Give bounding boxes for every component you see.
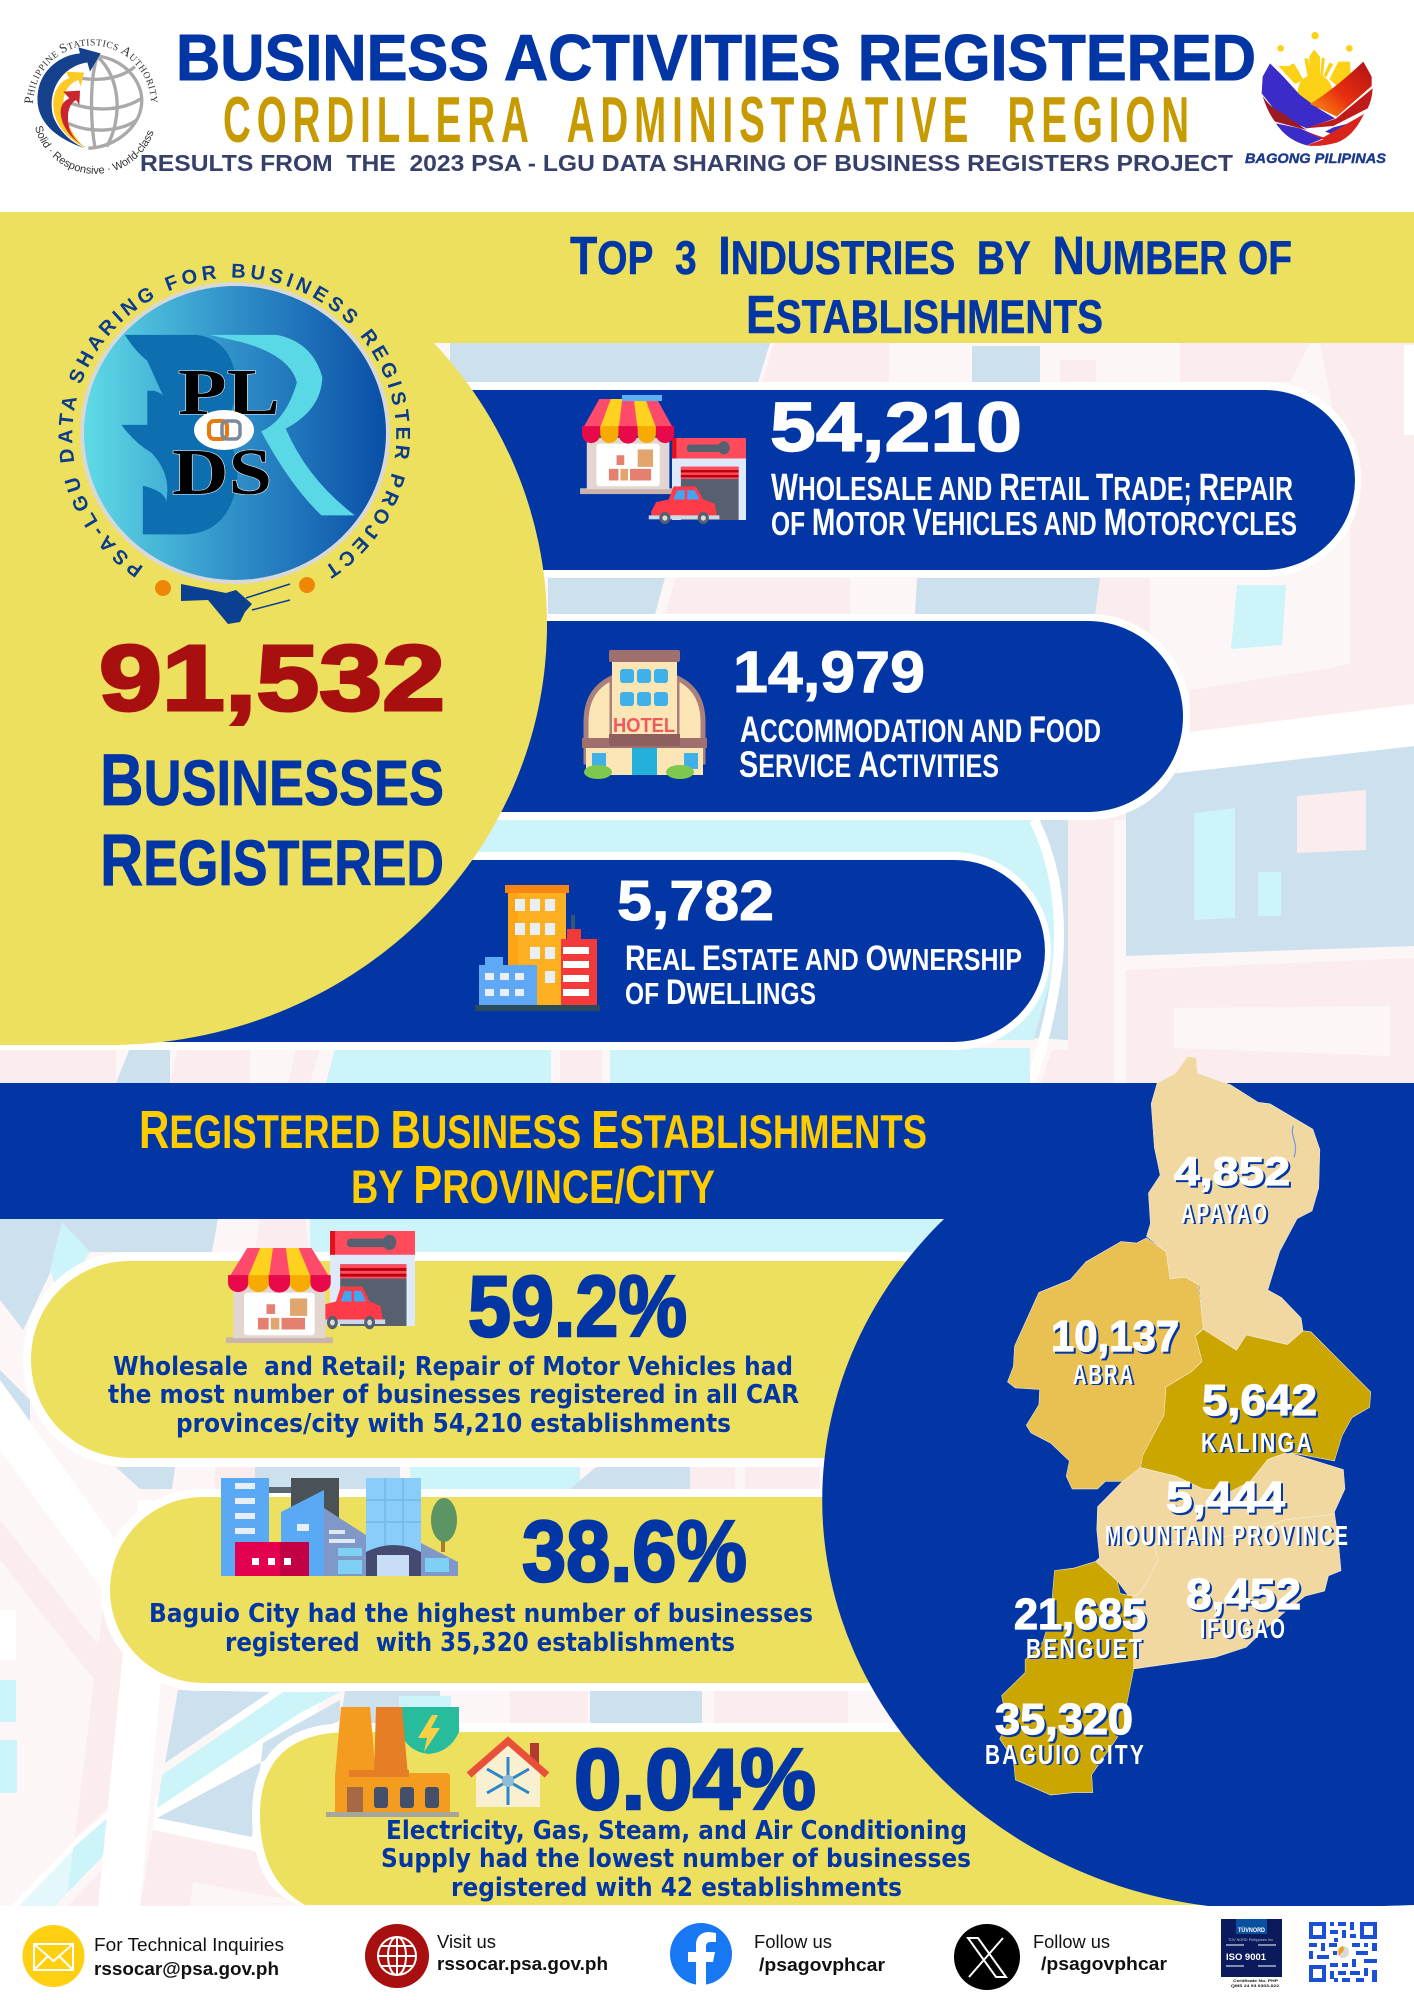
label: accommodation and food service: ACCOMMODATION AND FOOD [740, 709, 1101, 750]
label: businesses registered: REGISTERED [100, 818, 444, 901]
value: 54,210: 54,210 [770, 388, 1022, 466]
text: electricity note: registered with 42 establishments [451, 1873, 902, 1903]
logo disc [80, 282, 390, 584]
icon: hotel [582, 650, 707, 779]
value: Ifugao: IFUGAO [1200, 1613, 1287, 1644]
value: Ifugao [1186, 1570, 1301, 1644]
icon: globe [365, 1924, 429, 1988]
footer: email contact [22, 1925, 284, 1987]
pill: wholesale and retail [0, 382, 1361, 577]
logo letters [172, 356, 280, 509]
map shapes [1000, 1056, 1371, 1795]
icon: city buildings [475, 885, 600, 1011]
footer: X [954, 1924, 1167, 1990]
footer: QR code [1309, 1922, 1377, 1982]
heading: top 3 industries [570, 226, 1292, 345]
label: real estate and ownership: OF DWELLINGS [625, 972, 816, 1012]
value: Abra [1051, 1312, 1179, 1390]
icon: X [954, 1924, 1020, 1990]
value: Ifugao: 8,452 [1186, 1570, 1301, 1619]
panel: top 3 industries pills [0, 382, 1361, 1050]
header: PSA logo [24, 39, 158, 174]
icon: Facebook [670, 1923, 732, 1985]
footer: ISO 9001 badge: TÜVNORD [1238, 1927, 1266, 1934]
value: Baguio City: BAGUIO CITY [985, 1739, 1146, 1770]
label: businesses registered [100, 738, 444, 901]
value: Benguet: 21,685 [1014, 1590, 1146, 1639]
value: Mountain Province [1105, 1473, 1350, 1551]
label: accommodation and food service: SERVICE ACTIVITIES [739, 744, 999, 785]
callout: electricity 0.04% [326, 1700, 971, 1903]
heading: registered business establishments [139, 1100, 927, 1215]
river: Apayao [1292, 1126, 1296, 1157]
value: Benguet: BENGUET [1026, 1633, 1144, 1664]
text: wholesale note: the most number of businesses registered in all CAR [108, 1380, 799, 1410]
total: 91,532: 91,532 [99, 626, 445, 730]
icon: hotel: HOTEL [613, 715, 675, 737]
header: PSA logo: Solid · Responsive · World-class [36, 126, 154, 174]
footer: website: Visit us [437, 1932, 496, 1952]
logo wordmark: BAGONG PILIPINAS [1245, 150, 1387, 166]
ring text: PSA-LGU DATA SHARING FOR BUSINESS REGISTER PROJECT [58, 264, 410, 579]
value: Baguio City: 35,320 [995, 1695, 1133, 1744]
label: businesses registered: BUSINESSES [100, 738, 444, 821]
label: real estate and ownership: REAL ESTATE AND OWNERSHIP [625, 938, 1022, 978]
label: wholesale and retail trade: WHOLESALE AND RETAIL TRADE; REPAIR [771, 467, 1293, 509]
footer: ISO 9001 badge: TÜV NORD Philippines Inc. [1228, 1937, 1274, 1942]
chain icon [194, 410, 254, 450]
footer: X: Follow us [1033, 1932, 1110, 1952]
footer: ISO 9001 badge [1221, 1919, 1282, 1988]
logo: PSA-LGU data sharing [58, 264, 410, 624]
label: wholesale and retail trade [771, 467, 1297, 544]
pill: electricity share [252, 1723, 1200, 1905]
handshake icon [155, 577, 315, 624]
text: wholesale note: Wholesale and Retail; Repair of Motor Vehicles had [113, 1352, 793, 1382]
icon: factory with energy badge [326, 1700, 459, 1817]
footer: Facebook [670, 1923, 885, 1985]
region: Kalinga [1141, 1329, 1371, 1492]
icon: shop, garage and car [580, 395, 746, 524]
footer: X: /psagovphcar [1041, 1954, 1167, 1974]
logo letters: DS [172, 436, 272, 509]
region: Abra [1007, 1238, 1203, 1489]
label: real estate and ownership [625, 938, 1022, 1012]
text: wholesale note [108, 1352, 799, 1439]
text: Baguio note: Baguio City had the highest number of businesses [149, 1599, 813, 1629]
footer: email contact: For Technical Inquiries [94, 1935, 284, 1955]
value: Apayao [1174, 1150, 1290, 1229]
panel: blue province section [0, 1083, 1414, 2000]
panel: top 3 heading band [0, 212, 1414, 343]
logo letters: PL [178, 356, 280, 429]
panel: yellow pills [23, 1252, 1200, 1905]
value: Mountain Province: 5,444 [1166, 1473, 1286, 1522]
footer: Facebook: Follow us [754, 1932, 832, 1952]
value: 0.04%: 0.04% [574, 1732, 816, 1828]
text: electricity note: Supply had the lowest number of businesses [381, 1844, 971, 1874]
pill: Baguio share [101, 1489, 1110, 1691]
region: Apayao [1146, 1056, 1320, 1350]
footer: website: rssocar.psa.gov.ph [437, 1954, 608, 1974]
value: 5,782: 5,782 [617, 869, 774, 933]
icon: mail [22, 1925, 84, 1987]
heading: top 3 industries: TOP 3 INDUSTRIES BY NUMBER OF [570, 226, 1292, 286]
pill: accommodation and food [0, 614, 1190, 820]
label: wholesale and retail trade: OF MOTOR VEHICLES AND MOTORCYCLES [771, 502, 1297, 544]
value: Kalinga [1201, 1376, 1317, 1458]
region: Benguet and Baguio City [1000, 1561, 1134, 1795]
background map: lower [0, 1218, 1000, 1907]
panel: yellow total circle [0, 343, 547, 1045]
footer: ISO 9001 badge: Certificate No. PHP [1233, 1978, 1278, 1983]
value: Benguet [1014, 1590, 1146, 1664]
header: PSA logo: PHILIPPINE STATISTICS AUTHORITY [24, 39, 158, 104]
value: Apayao: 4,852 [1174, 1150, 1290, 1194]
heading: top 3 industries: ESTABLISHMENTS [746, 285, 1103, 345]
callout: wholesale 59.2% [108, 1231, 799, 1439]
background map: upper [0, 340, 1414, 1085]
tagline: RESULTS FROM THE 2023 PSA - LGU DATA SHARING OF BUSINESS REGISTERS PROJECT [140, 150, 1233, 176]
footer: ISO 9001 badge: ISO 9001 [1226, 1952, 1266, 1962]
value: 14,979: 14,979 [733, 640, 925, 705]
footer: Facebook: /psagovphcar [759, 1955, 885, 1975]
title: BUSINESS ACTIVITIES REGISTERED [176, 21, 1256, 94]
callout: Baguio 38.6% [149, 1478, 813, 1658]
header: Bagong Pilipinas logo [1245, 32, 1387, 166]
text: electricity note: Electricity, Gas, Steam, and Air Conditioning [386, 1816, 967, 1846]
icon: city buildings [221, 1478, 458, 1576]
label: accommodation and food service [739, 709, 1101, 785]
footer: email contact: rssocar@psa.gov.ph [94, 1959, 279, 1979]
text: wholesale note: provinces/city with 54,210 establishments [176, 1409, 731, 1439]
value: Abra: ABRA [1073, 1359, 1135, 1390]
value: Apayao: APAYAO [1181, 1198, 1269, 1229]
value: Baguio City [985, 1695, 1146, 1770]
text: Baguio note [149, 1599, 813, 1658]
footer: website [365, 1924, 608, 1988]
map: CAR provinces [985, 1056, 1371, 1795]
icon: shop and garage [226, 1231, 415, 1343]
value: Abra: 10,137 [1051, 1312, 1179, 1361]
footer: ISO 9001 badge: QMS 24 93 0303-022 [1231, 1983, 1280, 1988]
value: Kalinga: KALINGA [1201, 1427, 1314, 1458]
icon: house with snowflake [469, 1741, 547, 1807]
value: 38.6%: 38.6% [522, 1504, 747, 1600]
text: electricity note [381, 1816, 971, 1903]
value: Kalinga: 5,642 [1202, 1376, 1317, 1425]
value: 59.2%: 59.2% [468, 1259, 687, 1355]
heading: registered business establishments: REGISTERED BUSINESS ESTABLISHMENTS [139, 1100, 927, 1160]
heading: registered business establishments: BY PROVINCE/CITY [351, 1155, 715, 1215]
region: Mountain Province and Ifugao [1096, 1452, 1345, 1669]
text: Baguio note: registered with 35,320 establishments [225, 1628, 735, 1658]
pill: real estate [0, 852, 1051, 1050]
pill: wholesale share [23, 1252, 1031, 1467]
